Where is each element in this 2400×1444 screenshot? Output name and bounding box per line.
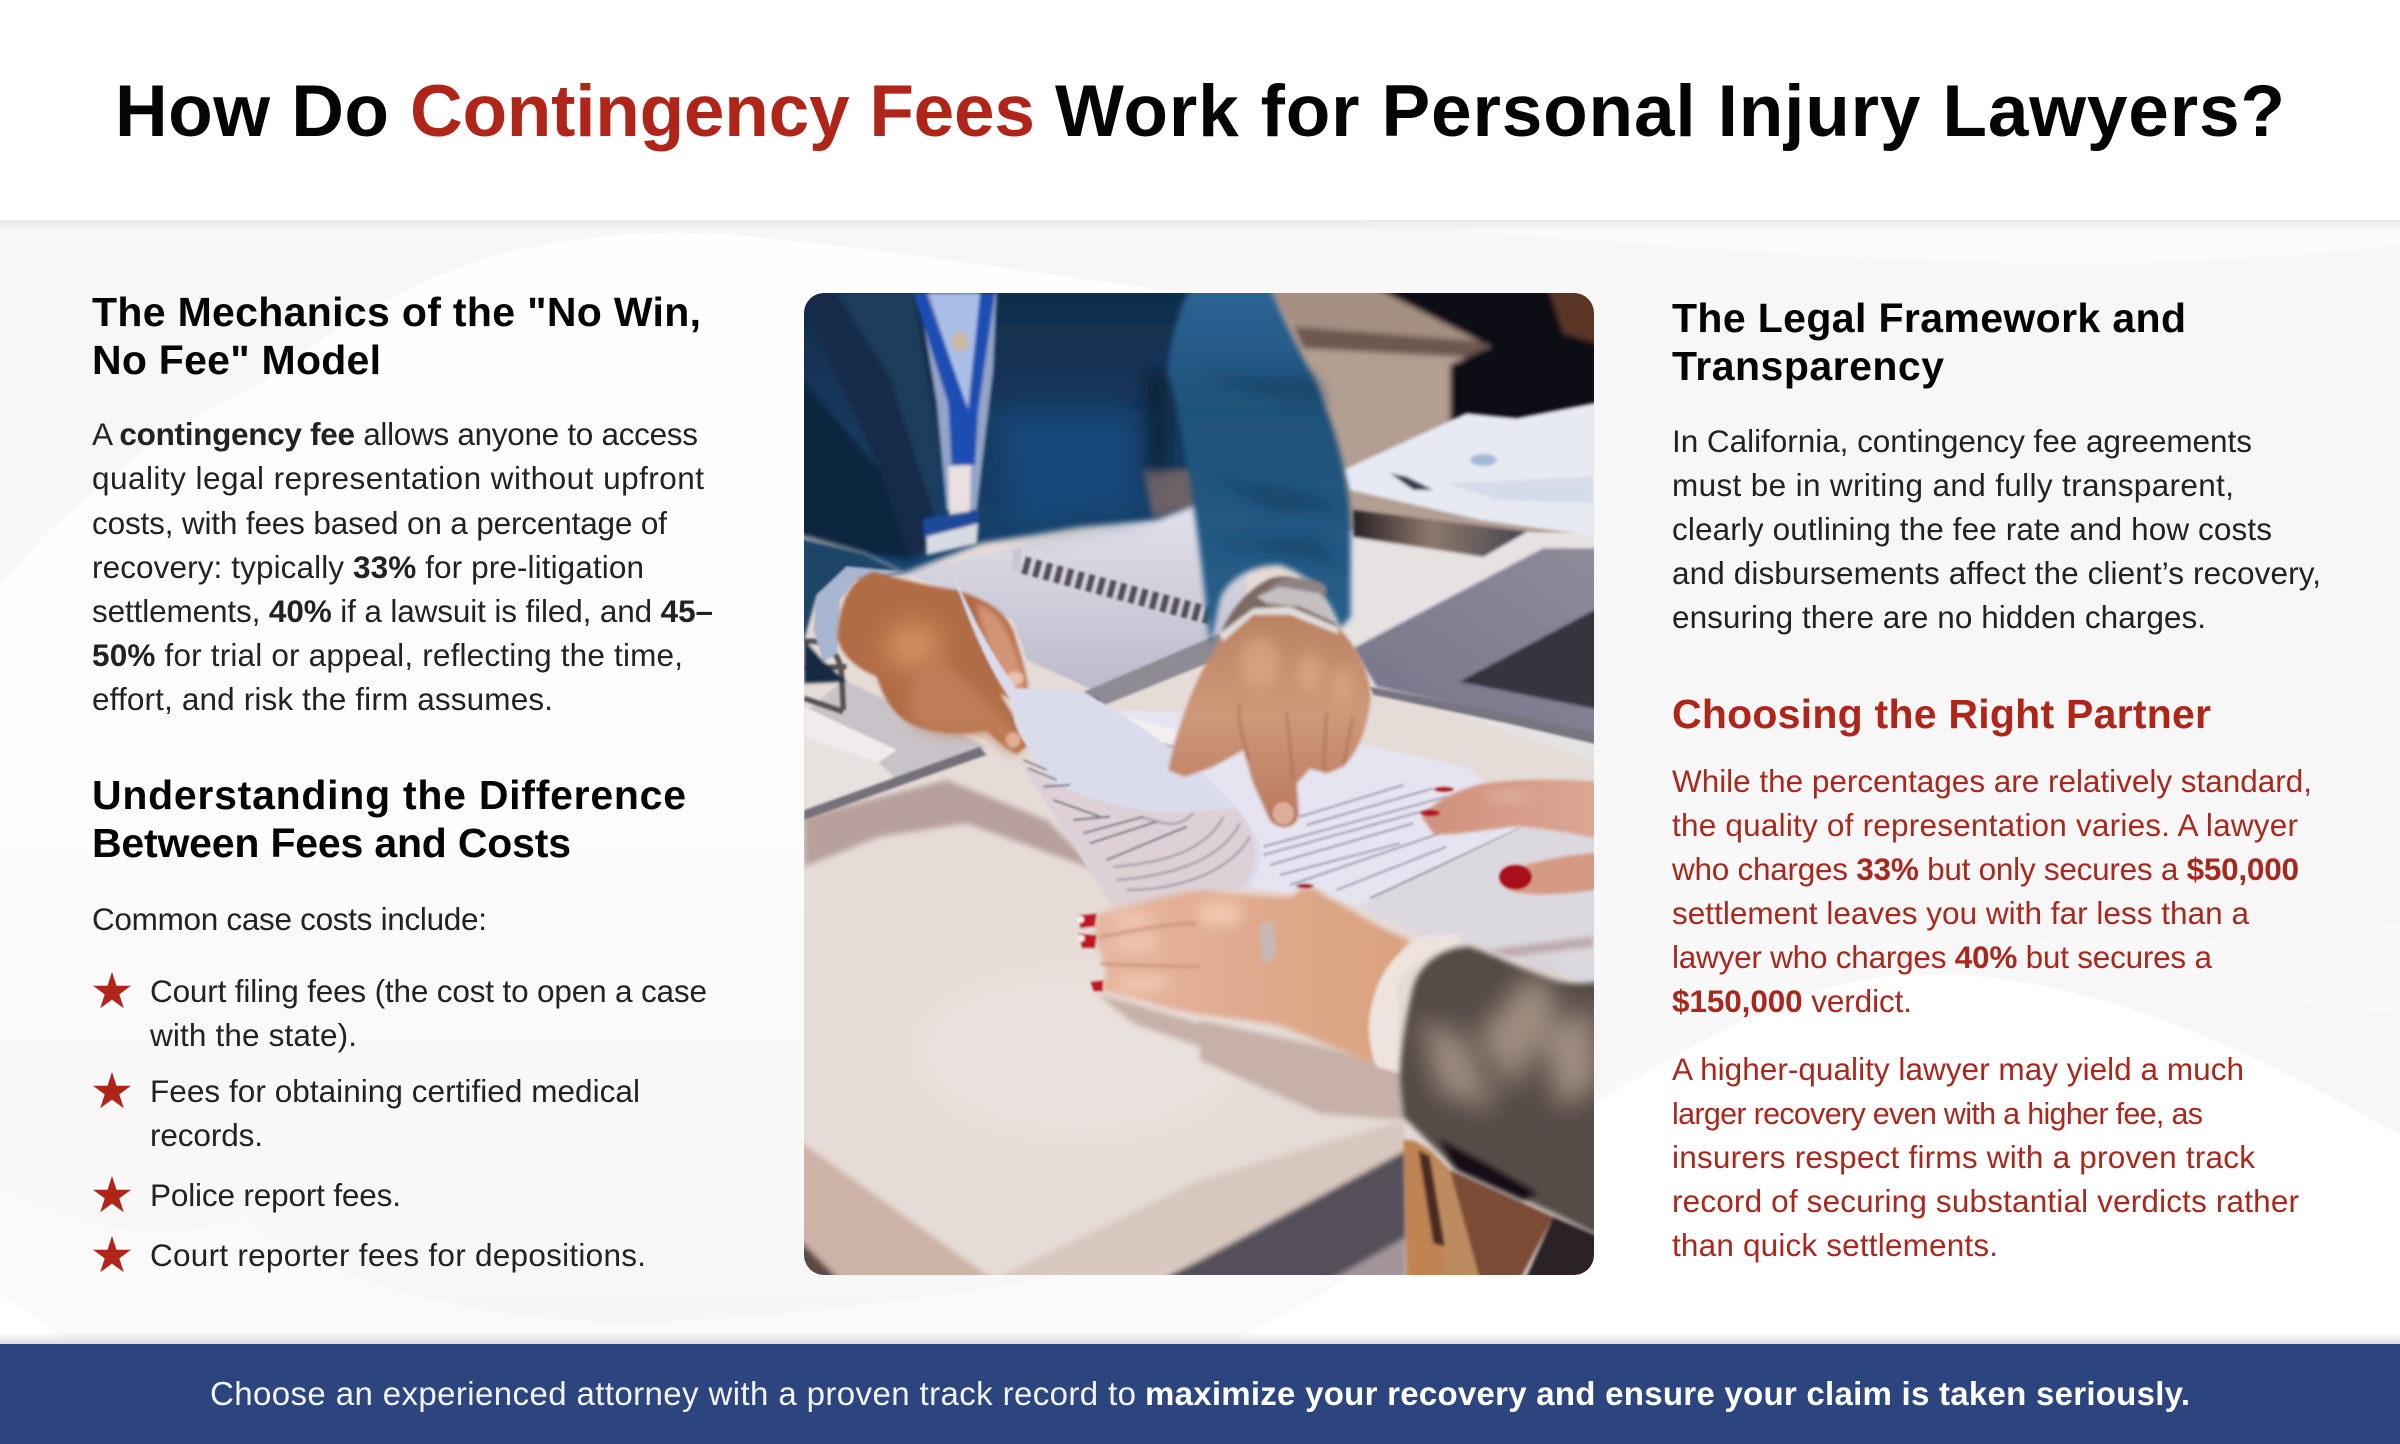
list item: court reporter: Court reporter fees for depositions.	[150, 1237, 646, 1273]
woman's right hand, lower	[1487, 852, 1620, 957]
laptop	[1353, 546, 1594, 746]
trousers	[1401, 1138, 1594, 1275]
text block: list intro: Common case costs include:	[92, 901, 487, 937]
heading: legal framework	[1672, 295, 2186, 389]
text block: California agreements: and disbursements affect the client’s recovery,	[1672, 555, 2321, 591]
notebook	[903, 500, 1247, 708]
man's pointing hand	[1168, 605, 1371, 827]
icon: star	[93, 972, 131, 1008]
list item: medical records: records.	[150, 1117, 263, 1153]
photo: attorney and client reviewing document	[780, 270, 1620, 1290]
heading: choosing the right partner: Choosing the Right Partner	[1672, 691, 2211, 737]
man's cuff and lower left sleeve	[793, 537, 903, 683]
list item: court filing fees	[149, 973, 707, 1053]
text block: contingency fee explanation: settlements, 40% if a lawsuit is filed, and 45–	[92, 593, 713, 629]
text block: higher-quality lawyer: insurers respect firms with a proven track	[1672, 1139, 2255, 1175]
heading: legal framework: The Legal Framework and	[1672, 295, 2186, 341]
text block: quality of representation	[1671, 763, 2312, 1019]
curled paper page	[950, 565, 1260, 907]
title: How Do	[115, 71, 389, 152]
woman's white cuff	[1369, 933, 1460, 1073]
woman's central hand	[1077, 884, 1410, 1063]
text block: contingency fee explanation: 50% for trial or appeal, reflecting the time,	[92, 637, 683, 673]
footer call to action: maximize your recovery and ensure your claim is taken seriously.	[1145, 1375, 2190, 1412]
text block: higher-quality lawyer: A higher-quality lawyer may yield a much	[1672, 1051, 2244, 1087]
woman's sleeve	[1400, 947, 1600, 1237]
text block: higher-quality lawyer: than quick settlements.	[1672, 1227, 1998, 1263]
icon: star	[93, 1072, 131, 1108]
text block: California agreements: must be in writing and fully transparent,	[1672, 467, 2234, 503]
heading: fees versus costs	[92, 772, 686, 866]
heading: mechanics: No Fee" Model	[92, 337, 381, 383]
text block: quality of representation: While the percentages are relatively standard,	[1672, 763, 2312, 799]
man's left hand	[837, 572, 1030, 754]
footer call to action	[210, 1375, 2190, 1412]
list item: medical records	[150, 1073, 640, 1153]
text block: quality of representation: lawyer who charges 40% but secures a	[1672, 939, 2212, 975]
list item: court filing fees: Court filing fees (the cost to open a case	[150, 973, 707, 1009]
text block: contingency fee explanation: effort, and risk the firm assumes.	[92, 681, 553, 717]
icon: star	[93, 1236, 131, 1272]
stacked papers and phone	[1343, 398, 1620, 557]
binder on table	[804, 641, 987, 820]
left column	[92, 289, 713, 1273]
text block: quality of representation: $150,000 verdict.	[1672, 983, 1912, 1019]
heading: legal framework: Transparency	[1672, 343, 1944, 389]
text block: higher-quality lawyer	[1672, 1051, 2299, 1263]
table shadows	[804, 780, 1403, 1120]
icon: star	[93, 1176, 131, 1212]
footer banner	[0, 1332, 2400, 1444]
list: common case costs	[93, 972, 707, 1273]
text block: California agreements	[1672, 423, 2321, 635]
right column	[1671, 295, 2321, 1263]
text block: contingency fee explanation	[92, 416, 713, 717]
heading: mechanics	[92, 289, 701, 383]
woman's right hand, upper	[1419, 778, 1594, 840]
title	[115, 71, 2285, 152]
text block: contingency fee explanation: costs, with fees based on a percentage of	[92, 505, 667, 541]
list item: medical records: Fees for obtaining certified medical	[150, 1073, 640, 1109]
text block: contingency fee explanation: recovery: typically 33% for pre-litigation	[92, 549, 644, 585]
text block: quality of representation: the quality of representation varies. A lawyer	[1672, 807, 2298, 843]
blurred office background	[1268, 293, 1594, 534]
page background with soft waves	[0, 220, 2400, 1344]
text block: contingency fee explanation: A contingency fee allows anyone to access	[92, 416, 698, 452]
text block: California agreements: ensuring there are no hidden charges.	[1672, 599, 2206, 635]
shirt and lanyard	[913, 293, 997, 555]
title: Work for Personal Injury Lawyers?	[1055, 71, 2285, 152]
text block: quality of representation: settlement leaves you with far less than a	[1672, 895, 2249, 931]
table under women's hand	[1364, 828, 1594, 980]
header band	[0, 0, 2400, 232]
table soft light	[907, 960, 1253, 1147]
title: Contingency Fees	[410, 71, 1035, 152]
text block: higher-quality lawyer: record of securing substantial verdicts rather	[1672, 1183, 2299, 1219]
list item: court filing fees: with the state).	[149, 1017, 357, 1053]
flat document	[1113, 710, 1523, 905]
heading: fees versus costs: Understanding the Difference	[92, 772, 686, 818]
jacket body	[804, 293, 1197, 578]
text block: California agreements: In California, contingency fee agreements	[1672, 423, 2252, 459]
footer call to action: Choose an experienced attorney with a proven track record to	[210, 1375, 1136, 1412]
heading: fees versus costs: Between Fees and Costs	[92, 820, 571, 866]
text block: higher-quality lawyer: larger recovery even with a higher fee, as	[1672, 1097, 2203, 1131]
text block: contingency fee explanation: quality legal representation without upfront	[92, 460, 704, 496]
table, far right	[1342, 530, 1594, 760]
text block: quality of representation: who charges 33% but only secures a $50,000	[1671, 851, 2299, 887]
text block: California agreements: clearly outlining the fee rate and how costs	[1672, 511, 2272, 547]
jacket sleeve	[1167, 283, 1351, 647]
table lower edge	[804, 1122, 1408, 1275]
list item: police report: Police report fees.	[150, 1177, 401, 1213]
heading: mechanics: The Mechanics of the "No Win,	[92, 289, 701, 335]
wristwatch	[1220, 576, 1340, 642]
